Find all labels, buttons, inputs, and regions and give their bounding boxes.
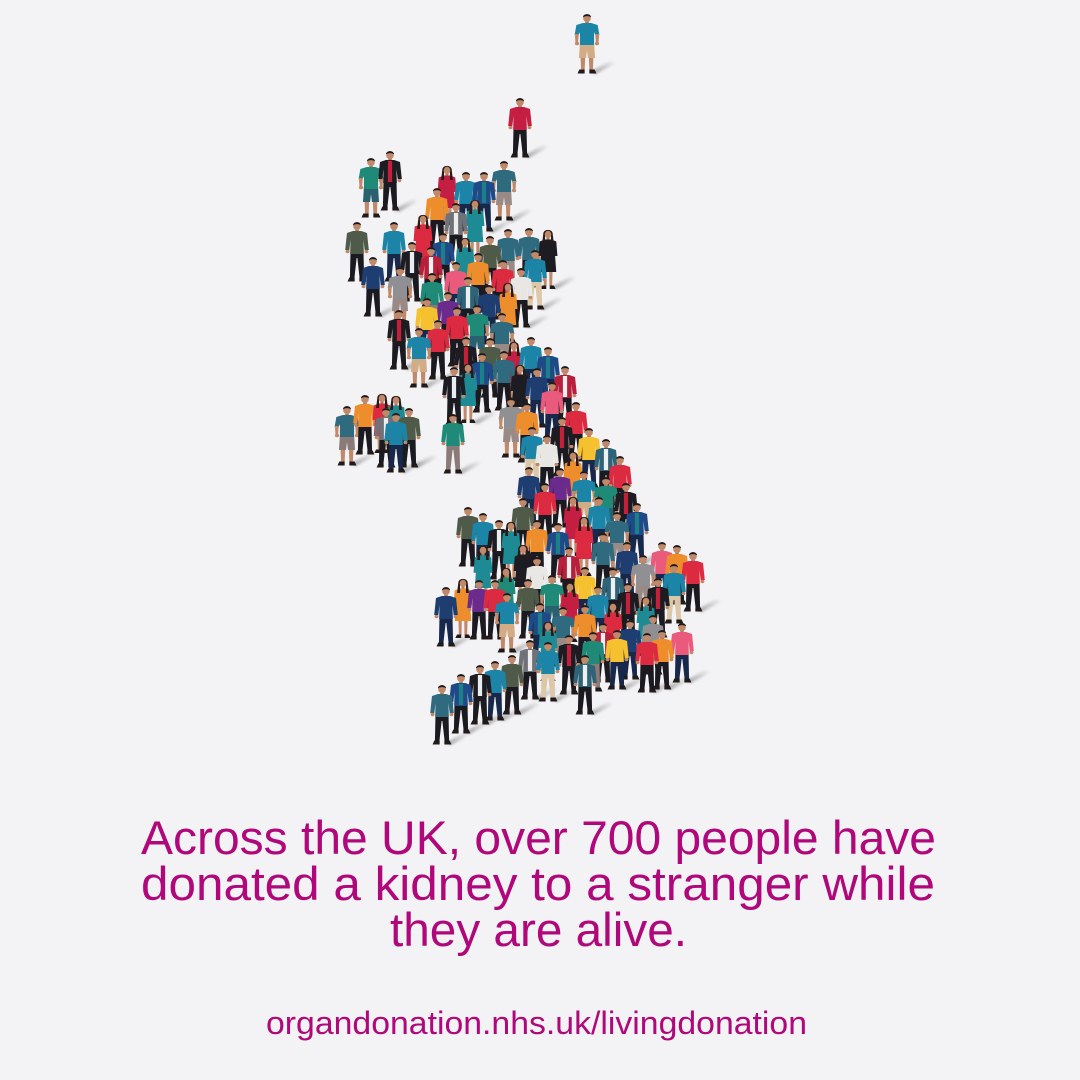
web address: organdonation.nhs.uk/livingdonation — [266, 1005, 807, 1041]
ground shadows beneath the crowd — [350, 61, 722, 745]
figure: Shetland, lone man in blue top — [575, 14, 599, 74]
headline: Across the UK, over 700 people have — [141, 811, 936, 864]
headline: they are alive. — [390, 903, 687, 956]
map of the UK made of people — [335, 14, 722, 745]
headline: donated a kidney to a stranger while — [141, 857, 935, 910]
figure: Orkney, woman in red top — [508, 98, 532, 158]
headline — [141, 811, 936, 956]
crowd: southern England and Wales — [430, 503, 705, 744]
crowd: Northern Ireland — [335, 394, 421, 472]
crowd: northern and central England — [441, 337, 638, 558]
crowd: Scotland and northern England — [345, 151, 557, 388]
